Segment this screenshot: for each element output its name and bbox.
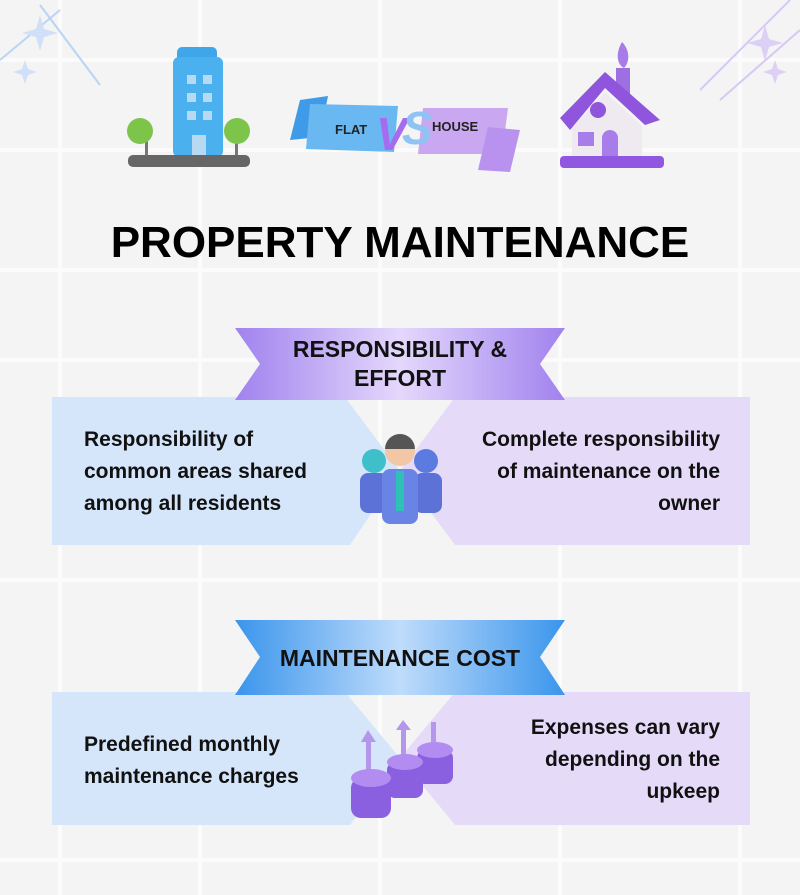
ribbon heading (235, 328, 565, 400)
icon: people (360, 434, 442, 524)
icon: building (127, 47, 250, 167)
icon: house (560, 42, 664, 168)
icon: flat vs house banner: HOUSE (432, 119, 479, 134)
text: house: Expenses can vary depending on the upkeep (531, 716, 720, 803)
icon: sparkle left (0, 4, 101, 86)
section: responsibility & effort (52, 328, 750, 545)
ribbon heading: RESPONSIBILITY & (293, 336, 507, 362)
text: house: Complete responsibility of maintenance on the owner (482, 428, 720, 515)
icon: flat vs house banner: FLAT (335, 122, 367, 137)
icon: flat vs house banner: S (402, 102, 433, 154)
icon: flat vs house banner (290, 96, 520, 172)
ribbon heading: EFFORT (354, 365, 446, 391)
icon: flat vs house banner: V (376, 108, 410, 160)
ribbon heading: MAINTENANCE COST (280, 645, 520, 671)
text: flat: Predefined monthly maintenance charges (84, 733, 299, 788)
text: flat: Responsibility of common areas shared among all residents (84, 428, 307, 515)
title: PROPERTY MAINTENANCE (111, 218, 689, 267)
icon: sparkle right (700, 0, 800, 101)
section: maintenance cost (52, 620, 750, 825)
ribbon heading (235, 620, 565, 695)
icon: coins (351, 720, 453, 818)
panels (52, 397, 750, 545)
panels (52, 692, 750, 825)
